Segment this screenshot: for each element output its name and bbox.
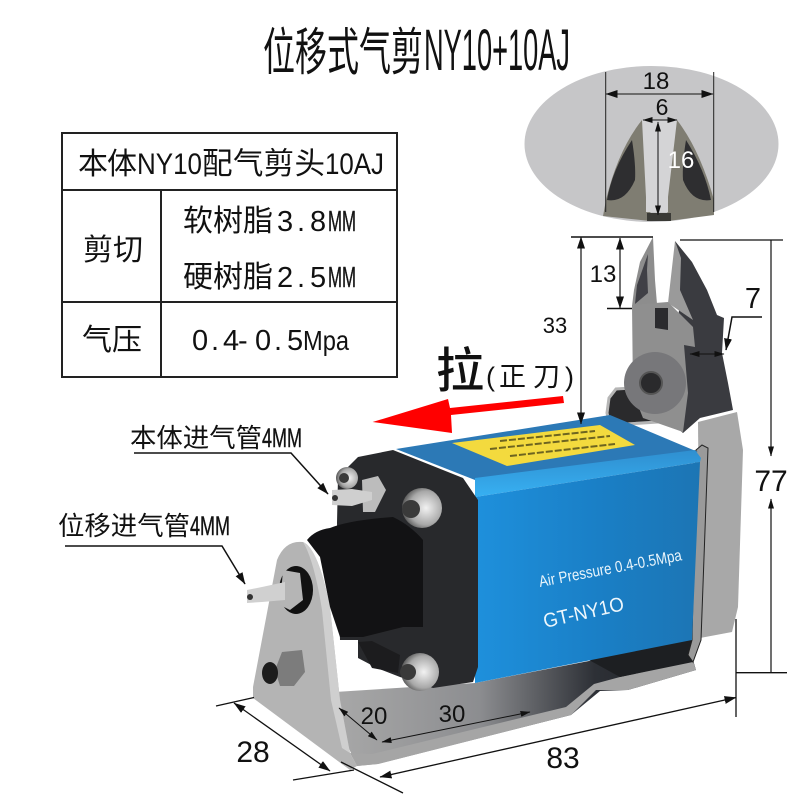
dimension 7 xyxy=(690,283,762,354)
callout: displacement air inlet: 位移进气管 xyxy=(58,511,190,541)
hard resin value: 2.5 xyxy=(277,262,326,294)
callout: body air inlet: 本体进气管 xyxy=(130,423,262,453)
right bolt xyxy=(402,488,442,528)
photo: pneumatic shear assembly xyxy=(247,237,743,770)
left bracket plate xyxy=(253,542,357,770)
dimension 7: 7 xyxy=(745,283,761,315)
left blade xyxy=(632,237,657,306)
base plate xyxy=(335,655,696,766)
bottom bolt xyxy=(400,653,439,691)
callout: displacement air inlet xyxy=(58,511,245,584)
printed text: air pressure: Air Pressure 0.4-0.5Mpa xyxy=(538,547,683,591)
dimension 77: 77 xyxy=(754,465,788,498)
cylinder highlight band xyxy=(475,450,701,497)
dimension 28 xyxy=(216,698,354,780)
dimension 30 xyxy=(382,701,530,742)
table header text: 本体 xyxy=(78,148,137,181)
right vertical bracket xyxy=(698,412,743,638)
panel: blade close-up ellipse xyxy=(524,66,778,222)
back bracket behind pliers xyxy=(607,388,690,425)
dimension 33: 33 xyxy=(543,313,567,338)
row label: shearing: 剪切 xyxy=(83,234,143,267)
hard resin value: MM xyxy=(328,262,356,294)
bracket inner strip xyxy=(688,445,708,662)
pliers silver plate xyxy=(632,302,695,432)
dimension 28: 28 xyxy=(236,736,270,769)
soft resin value: MM xyxy=(328,206,356,238)
hard resin value xyxy=(183,261,356,294)
lower cap foot xyxy=(358,641,400,673)
body air inlet fitting xyxy=(332,476,386,512)
dimension 16 xyxy=(658,122,694,215)
dimension 13 xyxy=(590,238,632,308)
dimension 20 xyxy=(339,703,387,740)
dimension 18: 18 xyxy=(643,68,669,95)
label: pull: 拉 xyxy=(436,345,484,398)
black pneumatic cylinder xyxy=(307,517,423,637)
callout: body air inlet xyxy=(130,423,328,494)
dark shadow under cylinder xyxy=(580,636,693,677)
dimension 20: 20 xyxy=(361,703,387,730)
soft resin value xyxy=(183,205,356,238)
table header text: 配气剪头 xyxy=(202,147,325,181)
title xyxy=(263,18,570,83)
cylinder front face xyxy=(475,462,700,683)
table header text: NY10 xyxy=(137,148,202,181)
dimension 13: 13 xyxy=(590,261,616,288)
dimension 6 xyxy=(643,94,677,120)
callout: body air inlet: 4MM xyxy=(262,423,302,453)
air pressure value: 0.4-0.5 xyxy=(192,325,303,357)
dimension 6: 6 xyxy=(656,94,668,120)
dimension 83 xyxy=(341,698,736,793)
black end cap xyxy=(337,450,478,688)
label: forward blade: (正刀) xyxy=(486,362,574,392)
dimension 30: 30 xyxy=(439,701,465,728)
displacement air inlet fitting xyxy=(247,566,313,614)
dimension 18 xyxy=(606,68,714,212)
lower screw and nut xyxy=(262,650,305,686)
text: NY10+10AJ xyxy=(424,18,570,83)
title: 位移式气剪 xyxy=(263,24,423,82)
yellow warning label xyxy=(452,425,635,466)
dimension 83: 83 xyxy=(546,742,580,775)
pliers pivot washer xyxy=(624,352,686,414)
table grid xyxy=(62,133,397,377)
row label: air pressure: 气压 xyxy=(82,324,142,357)
red pull arrow xyxy=(373,396,564,433)
air pressure value: Mpa xyxy=(303,325,349,356)
blade tip photo xyxy=(603,120,714,221)
panel: specification table xyxy=(62,133,397,377)
table header text xyxy=(78,147,384,181)
hard resin value: 硬树脂 xyxy=(183,261,273,294)
dimension 16: 16 xyxy=(668,147,694,174)
printed text: model: GT-NY1O xyxy=(541,593,626,633)
cylinder top face xyxy=(396,415,698,480)
ellipse background xyxy=(524,66,778,222)
top-left bolt xyxy=(336,467,358,489)
callout: displacement air inlet: 4MM xyxy=(190,511,230,541)
right blade silver edge xyxy=(668,241,693,320)
table header text: 10AJ xyxy=(325,148,384,181)
dimension 77 xyxy=(680,240,788,717)
soft resin value: 软树脂 xyxy=(183,205,273,238)
soft resin value: 3.8 xyxy=(277,206,326,238)
dark pliers jaw xyxy=(668,241,733,433)
